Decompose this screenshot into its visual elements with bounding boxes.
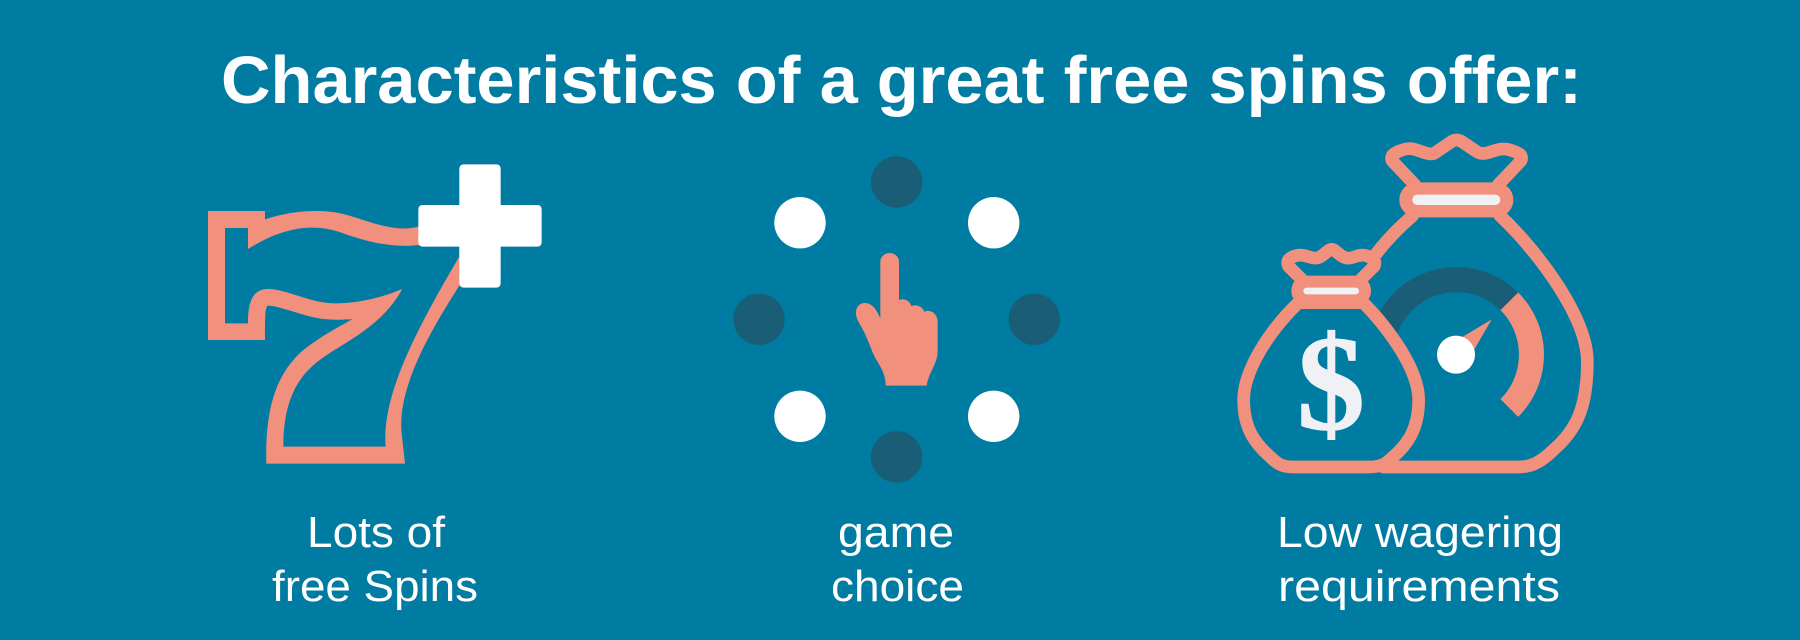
small bag neck: [1291, 276, 1371, 306]
gauge needle: [1462, 319, 1492, 349]
label: lots of free spins: [272, 508, 478, 611]
icon: hand choosing between dots: [733, 156, 1060, 483]
pointing hand: [856, 253, 938, 386]
label: low wagering requirements: requirements: [1278, 562, 1560, 611]
white dots: [774, 197, 1019, 442]
icon: lucky seven with plus: [208, 164, 542, 464]
label: low wagering requirements: Low wagering: [1277, 508, 1563, 557]
label: game choice: game: [838, 508, 954, 557]
label: low wagering requirements: [1277, 508, 1563, 611]
label: lots of free spins: free Spins: [272, 562, 478, 611]
large bag: [1376, 140, 1587, 467]
label: game choice: choice: [831, 562, 964, 611]
seven outline: [208, 211, 463, 464]
large bag neck: [1399, 182, 1513, 217]
gauge: [1383, 280, 1531, 408]
small bag: [1244, 303, 1419, 467]
title: Characteristics of a great free spins offer:: [221, 43, 1582, 118]
dollar sign: $: [1297, 309, 1365, 459]
dark dots: [733, 156, 1060, 483]
plus sign: [418, 164, 542, 288]
icon: money bags with gauge: [1244, 140, 1587, 467]
label: lots of free spins: Lots of: [307, 508, 446, 557]
label: game choice: [831, 508, 964, 611]
